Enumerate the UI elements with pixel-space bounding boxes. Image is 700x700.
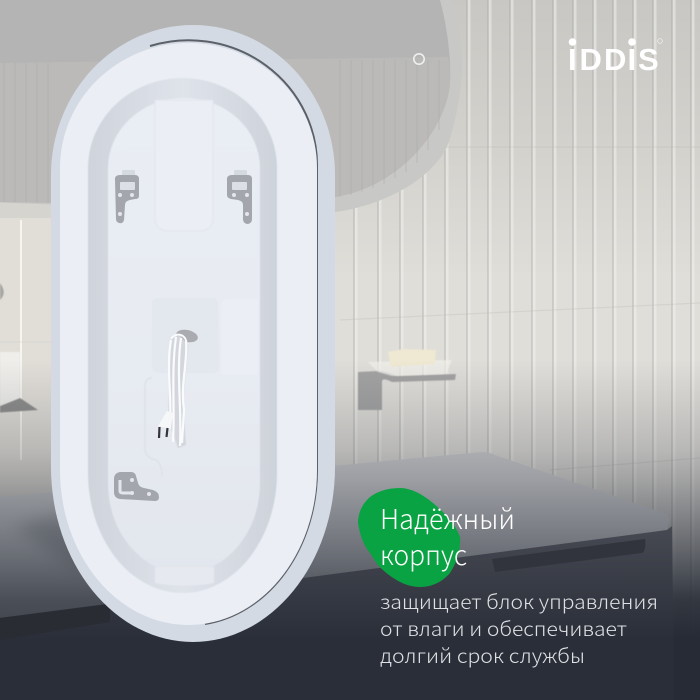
description text: от влаги и обеспечивает (380, 613, 627, 642)
dark bottom gradient overlay (0, 360, 700, 700)
heading: корпус (380, 533, 467, 573)
soap bar (388, 349, 436, 367)
soap dish on wall (358, 349, 456, 410)
bracket: top left (115, 170, 139, 223)
cable recess (145, 298, 258, 476)
counter sheen (0, 452, 669, 618)
round wall mirror (0, 0, 462, 212)
registered mark (658, 39, 662, 43)
mirror touch button (414, 54, 424, 64)
dark seam line (150, 40, 317, 624)
recessed groove (88, 78, 277, 593)
glass plate (368, 360, 452, 376)
power cord with plug (158, 335, 188, 448)
vanity cabinet front (0, 526, 674, 700)
dish bracket (358, 371, 456, 410)
plug prongs (159, 427, 168, 438)
left shelf objects (0, 283, 38, 412)
cable hole (175, 328, 199, 344)
groove bridge (155, 567, 214, 586)
description text: защищает блок управления (380, 586, 658, 615)
top raised block (155, 100, 213, 231)
bracket: lower left (114, 472, 159, 501)
heading: Надёжный (380, 497, 515, 537)
plug body (158, 411, 173, 429)
cabinet handle slot (492, 539, 645, 572)
bracket: top right (227, 170, 252, 224)
counter top (0, 452, 669, 618)
description text: долгий срок службы (380, 640, 585, 669)
mirror back view (51, 25, 335, 642)
inner panel (108, 98, 260, 573)
white rear housing (60, 43, 317, 625)
outer frosted edge (51, 25, 335, 642)
iddis logo: IDDIS (568, 42, 659, 77)
green blob accent (358, 488, 460, 587)
